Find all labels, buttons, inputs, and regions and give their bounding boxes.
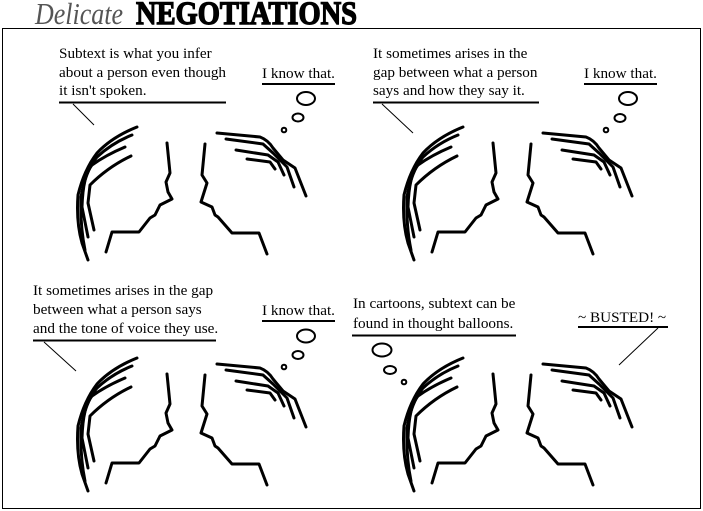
caption: gap in how they say it bbox=[373, 45, 539, 133]
caption: gap in how they say it: It sometimes arises in the bbox=[373, 45, 528, 62]
icon: thought bubbles bbox=[372, 344, 406, 384]
caption: subtext definition: it isn't spoken. bbox=[59, 82, 147, 99]
caption: thought balloons bbox=[352, 295, 516, 336]
title bbox=[34, 0, 357, 32]
caption: I know that: I know that. bbox=[584, 65, 657, 82]
figure: left face bbox=[78, 358, 172, 491]
caption: I know that: I know that. bbox=[262, 302, 335, 319]
panel: top left bbox=[59, 45, 335, 260]
caption: gap in how they say it: gap between what a person bbox=[373, 64, 538, 81]
icon: thought bubbles bbox=[282, 330, 315, 369]
panel: bottom right bbox=[352, 295, 668, 491]
caption: gap in tone of voice: and the tone of voice they use. bbox=[33, 320, 218, 337]
caption: subtext definition bbox=[59, 45, 226, 125]
panel: bottom left bbox=[33, 282, 335, 491]
figure: left face bbox=[404, 358, 498, 491]
figure: right face bbox=[201, 364, 306, 485]
caption: busted bbox=[578, 309, 668, 365]
caption: gap in tone of voice: between what a person says bbox=[33, 301, 202, 318]
figure: left face bbox=[78, 127, 172, 260]
icon: thought bubbles bbox=[604, 92, 637, 132]
figure: right face bbox=[201, 133, 306, 254]
caption: thought balloons: In cartoons, subtext can be bbox=[353, 295, 516, 312]
caption: gap in how they say it: says and how they say it. bbox=[373, 82, 525, 99]
panel: top right bbox=[373, 45, 657, 260]
figure: right face bbox=[527, 133, 632, 254]
caption: gap in tone of voice bbox=[33, 282, 218, 371]
caption: thought balloons: found in thought balloons. bbox=[353, 315, 513, 332]
caption: busted: ~ BUSTED! ~ bbox=[578, 309, 666, 326]
figure: left face bbox=[404, 127, 498, 260]
caption: subtext definition: Subtext is what you infer bbox=[59, 45, 212, 62]
caption: gap in tone of voice: It sometimes arises in the gap bbox=[33, 282, 213, 299]
figure: right face bbox=[527, 364, 632, 485]
icon: thought bubbles bbox=[282, 92, 315, 132]
caption: subtext definition: about a person even though bbox=[59, 64, 226, 81]
caption: I know that: I know that. bbox=[262, 65, 335, 82]
